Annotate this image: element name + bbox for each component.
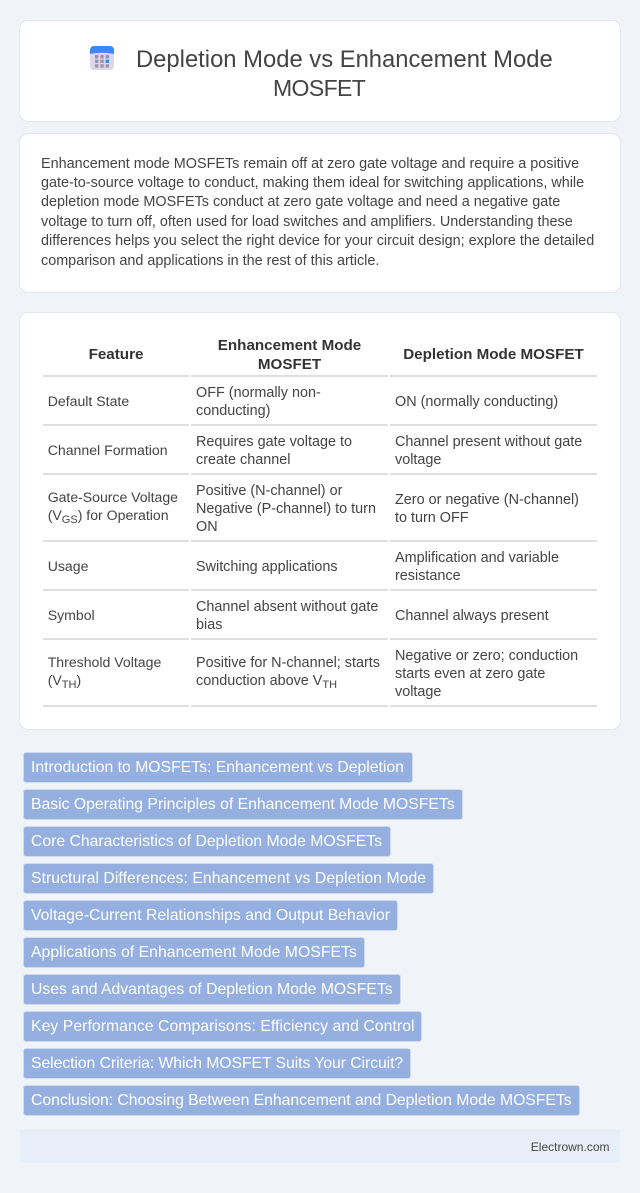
link pill: Introduction to MOSFETs: Enhancement vs Depletion xyxy=(31,759,404,776)
row: channel formation: create channel xyxy=(196,452,290,468)
link pill: Key Performance Comparisons: Efficiency and Control xyxy=(31,1018,415,1035)
row: default state xyxy=(48,385,558,419)
panel: introduction text xyxy=(20,134,620,292)
row: gate-source voltage: to turn OFF xyxy=(395,510,469,526)
link pill: Structural Differences: Enhancement vs Depletion Mode xyxy=(31,870,426,887)
link pill xyxy=(23,1011,422,1042)
link pill xyxy=(23,863,434,894)
row: channel formation: voltage xyxy=(395,452,441,468)
row: default state: ON (normally conducting) xyxy=(395,394,558,410)
row: gate-source voltage: Negative (P-channel) to turn xyxy=(196,501,376,517)
panel: table of contents links xyxy=(23,752,580,1116)
row: default state: OFF (normally non- xyxy=(196,385,321,401)
row: threshold voltage: conduction above VTH xyxy=(196,673,337,691)
row: gate-source voltage: Positive (N-channel) or xyxy=(196,483,342,499)
link pill xyxy=(23,826,391,857)
intro paragraph: gate-to-source voltage to conduct, making them ideal for switching applications, while xyxy=(41,175,584,191)
row: usage: resistance xyxy=(395,568,461,584)
row: default state: Default State xyxy=(48,393,129,409)
row: symbol: Channel always present xyxy=(395,608,549,624)
row: symbol: Symbol xyxy=(48,607,95,623)
title: Depletion Mode vs Enhancement Mode xyxy=(136,46,553,73)
row: usage: Amplification and variable xyxy=(395,550,559,566)
row: symbol xyxy=(48,599,549,633)
footer credit: Electrown.com xyxy=(531,1140,610,1154)
row: gate-source voltage: Gate-Source Voltage xyxy=(48,489,178,505)
row: gate-source voltage xyxy=(48,483,579,535)
row: symbol: bias xyxy=(196,617,222,633)
row: gate-source voltage: Zero or negative (N-channel) xyxy=(395,492,579,508)
row: symbol: Channel absent without gate xyxy=(196,599,378,615)
link pill xyxy=(23,900,398,931)
row: channel formation: Channel Formation xyxy=(48,442,168,458)
link pill: Basic Operating Principles of Enhancement Mode MOSFETs xyxy=(31,796,455,813)
row: threshold voltage: (VTH) xyxy=(48,672,81,691)
link pill: Selection Criteria: Which MOSFET Suits Your Circuit? xyxy=(31,1055,403,1072)
table header row: MOSFET xyxy=(258,356,321,373)
row: channel formation: Channel present without gate xyxy=(395,434,582,450)
link pill: Uses and Advantages of Depletion Mode MOSFETs xyxy=(31,981,393,998)
icon: calendar grid xyxy=(90,46,114,70)
row: threshold voltage: Negative or zero; conduction xyxy=(395,648,578,664)
row: channel formation xyxy=(48,434,582,468)
panel: comparison table xyxy=(20,313,620,729)
intro paragraph: depletion mode MOSFETs conduct at zero gate voltage and need a negative gate xyxy=(41,194,560,210)
table header row: Enhancement Mode xyxy=(218,337,361,354)
link pill xyxy=(23,752,413,783)
table header row: Depletion Mode MOSFET xyxy=(403,346,584,363)
link pill xyxy=(23,1085,580,1116)
title xyxy=(136,46,553,101)
table header row xyxy=(89,337,584,373)
table header row: Feature xyxy=(89,346,143,363)
row: threshold voltage: starts even at zero gate xyxy=(395,666,545,682)
link pill: Applications of Enhancement Mode MOSFETs xyxy=(31,944,357,961)
panel: title header xyxy=(20,21,620,121)
link pill: Voltage-Current Relationships and Output Behavior xyxy=(31,907,390,924)
row: gate-source voltage: (VGS) for Operation xyxy=(48,507,169,526)
row: usage xyxy=(48,550,559,584)
intro paragraph: Enhancement mode MOSFETs remain off at zero gate voltage and require a positive xyxy=(41,156,579,172)
row: threshold voltage xyxy=(48,648,578,700)
link pill xyxy=(23,1048,411,1079)
row: usage: Usage xyxy=(48,558,88,574)
intro paragraph xyxy=(41,156,594,269)
link pill xyxy=(23,789,463,820)
link pill xyxy=(23,937,365,968)
intro paragraph: differences helps you select the right device for your circuit design; explore the detailed xyxy=(41,233,594,249)
link pill xyxy=(23,974,401,1005)
title: MOSFET xyxy=(273,75,365,101)
intro paragraph: voltage to turn off, often used for load switches and amplifiers. Understanding these xyxy=(41,214,573,230)
row: default state: conducting) xyxy=(196,403,270,419)
row: usage: Switching applications xyxy=(196,559,338,575)
row: threshold voltage: Threshold Voltage xyxy=(48,654,161,670)
row: channel formation: Requires gate voltage to xyxy=(196,434,352,450)
link pill: Core Characteristics of Depletion Mode MOSFETs xyxy=(31,833,382,850)
intro paragraph: comparison and applications in the rest of this article. xyxy=(41,253,379,269)
link pill: Conclusion: Choosing Between Enhancement and Depletion Mode MOSFETs xyxy=(31,1092,572,1109)
row: threshold voltage: voltage xyxy=(395,684,441,700)
row: threshold voltage: Positive for N-channel; starts xyxy=(196,655,380,671)
footer xyxy=(20,1129,620,1163)
row: gate-source voltage: ON xyxy=(196,519,218,535)
